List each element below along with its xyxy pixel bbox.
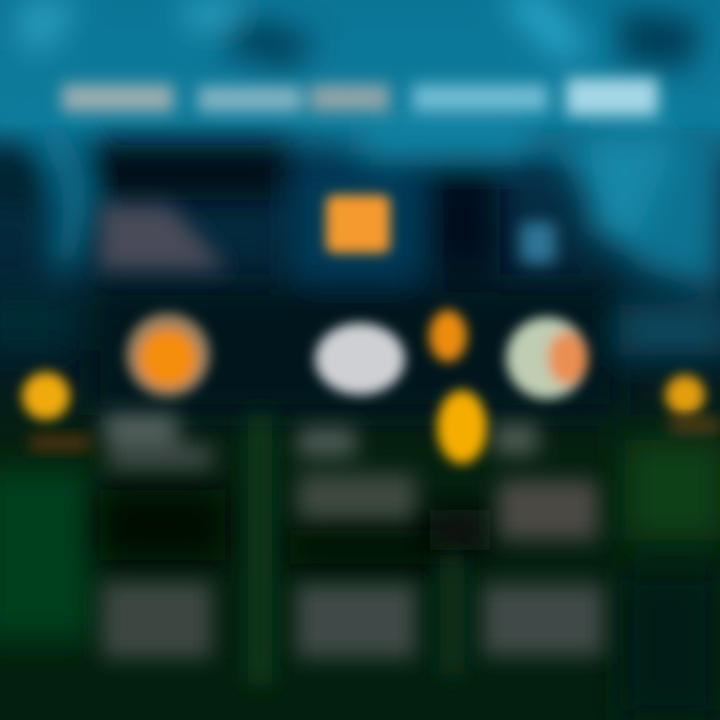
- lantern: right: [665, 375, 705, 415]
- lantern: centre large: [437, 390, 487, 464]
- text block: middle upper: [298, 428, 416, 520]
- icon: top orange square: [326, 195, 390, 253]
- ground glow: right: [670, 418, 720, 432]
- icon: white circle: [315, 323, 405, 395]
- lantern: left: [22, 372, 70, 420]
- grey block: top left: [100, 205, 228, 270]
- panel: left column: [100, 313, 225, 658]
- ground glow: left: [30, 436, 90, 450]
- icon: top blue square: [520, 222, 556, 264]
- title: [62, 78, 658, 116]
- panel: middle column: [290, 323, 460, 658]
- text block: right upper: [494, 424, 598, 540]
- icon: green and orange circle: [506, 317, 588, 399]
- panel: right column: [430, 317, 604, 656]
- column separators: [248, 415, 464, 685]
- text block: middle lower: [296, 584, 416, 658]
- icon: orange circle: [126, 313, 210, 397]
- lantern: centre small: [429, 310, 467, 362]
- text block: right lower: [482, 584, 604, 656]
- text block: left upper: [104, 414, 212, 470]
- text block: left lower: [102, 582, 212, 658]
